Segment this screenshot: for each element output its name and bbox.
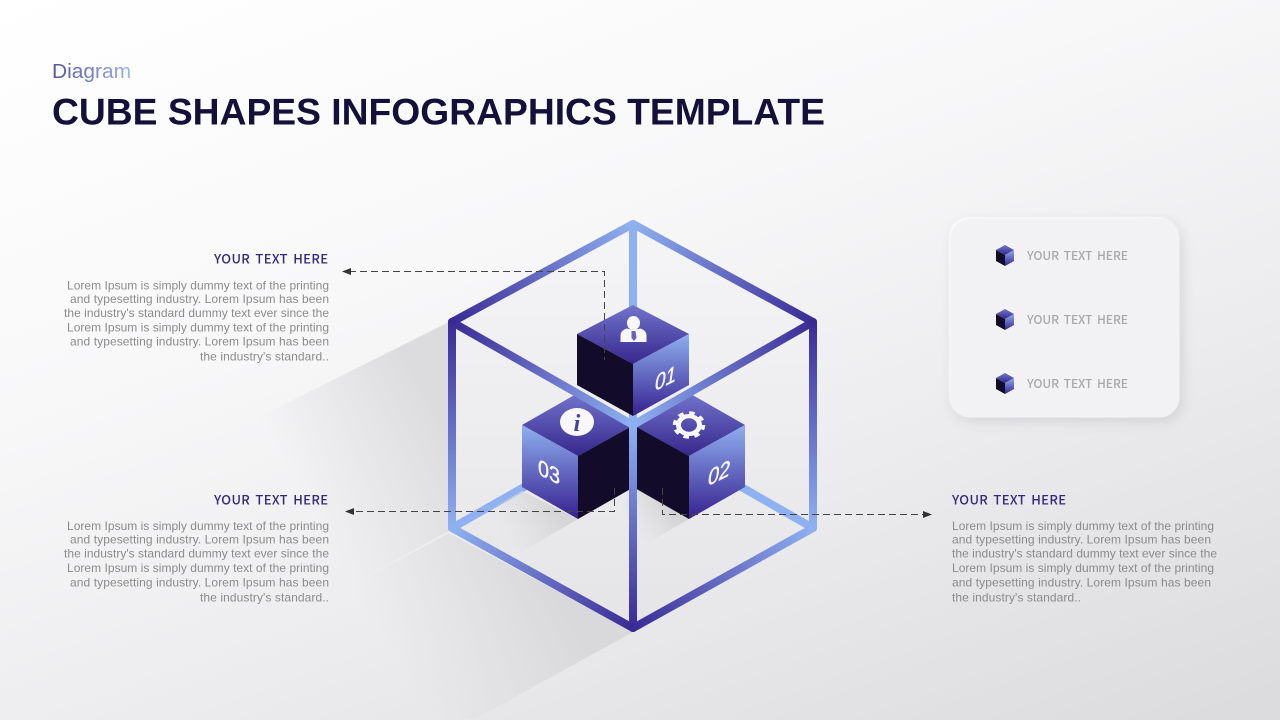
body: bottom left: the industry's standard..: [200, 590, 329, 604]
icon: gear: [675, 413, 703, 437]
heading: bottom right: YOUR TEXT HERE: [951, 490, 1066, 508]
wireframe cube: front edges and outline: [452, 224, 813, 628]
text block: bottom left: [64, 490, 329, 604]
arrow: to bottom right text: [662, 488, 932, 518]
cube 02: [633, 393, 745, 519]
text block: top left: [64, 248, 329, 364]
long shadow of the large cube: left side: [199, 322, 449, 640]
body: top left: and typesetting industry. Lorem Ipsum has been: [70, 292, 329, 306]
body: bottom right: Lorem Ipsum is simply dummy text of the printing: [952, 519, 1214, 533]
cube 03: [522, 393, 634, 519]
arrow: to bottom left text: [345, 488, 614, 515]
arrow: to top left text: [342, 268, 604, 360]
body: bottom left: and typesetting industry. Lorem Ipsum has been: [70, 576, 329, 590]
body: bottom left: [64, 519, 329, 604]
icon: info: i: [574, 411, 581, 437]
cube shadow: 02: [600, 487, 689, 549]
text block: bottom right: [951, 490, 1217, 604]
subtitle: Diagram: [52, 61, 131, 83]
cube shadow: 03: [468, 491, 578, 552]
body: bottom left: and typesetting industry. Lorem Ipsum has been: [70, 532, 329, 546]
legend item 2: [996, 309, 1128, 330]
body: bottom left: Lorem Ipsum is simply dummy text of the printing: [67, 561, 329, 575]
body: bottom right: and typesetting industry. Lorem Ipsum has been: [952, 532, 1211, 546]
legend item 2: YOUR TEXT HERE: [1026, 311, 1128, 328]
body: bottom right: the industry's standard..: [952, 590, 1081, 604]
number 01: 01: [655, 361, 676, 396]
body: top left: Lorem Ipsum is simply dummy text of the printing: [67, 320, 329, 334]
body: top left: the industry's standard dummy text ever since the: [64, 306, 329, 320]
number 03: 03: [538, 454, 560, 490]
body: top left: and typesetting industry. Lorem Ipsum has been: [70, 334, 329, 348]
body: bottom left: the industry's standard dummy text ever since the: [64, 546, 329, 560]
body: bottom right: [952, 519, 1217, 604]
panel background: [950, 218, 1180, 418]
body: bottom right: Lorem Ipsum is simply dummy text of the printing: [952, 561, 1214, 575]
number 02: 02: [708, 455, 730, 491]
body: bottom right: the industry's standard dummy text ever since the: [952, 546, 1217, 560]
wireframe cube: glass interior: [452, 224, 813, 628]
cube 01: [577, 305, 689, 416]
icon: person: [620, 316, 646, 342]
body: bottom right: and typesetting industry. Lorem Ipsum has been: [952, 576, 1211, 590]
body: top left: [64, 278, 329, 364]
body: bottom left: Lorem Ipsum is simply dummy text of the printing: [67, 519, 329, 533]
wireframe cube: back edges: [452, 224, 813, 528]
legend item 3: [996, 373, 1128, 394]
panel: legend: [950, 218, 1180, 418]
long shadow of the large cube: bottom side: [320, 533, 633, 719]
heading: bottom left: YOUR TEXT HERE: [213, 490, 328, 508]
heading: top left: YOUR TEXT HERE: [213, 248, 328, 268]
body: top left: Lorem Ipsum is simply dummy text of the printing: [67, 278, 329, 292]
body: top left: the industry's standard..: [200, 350, 329, 364]
legend item 1: [996, 245, 1128, 266]
legend item 3: YOUR TEXT HERE: [1026, 375, 1128, 392]
legend item 1: YOUR TEXT HERE: [1026, 247, 1128, 264]
title: CUBE SHAPES INFOGRAPHICS TEMPLATE: [52, 92, 825, 132]
